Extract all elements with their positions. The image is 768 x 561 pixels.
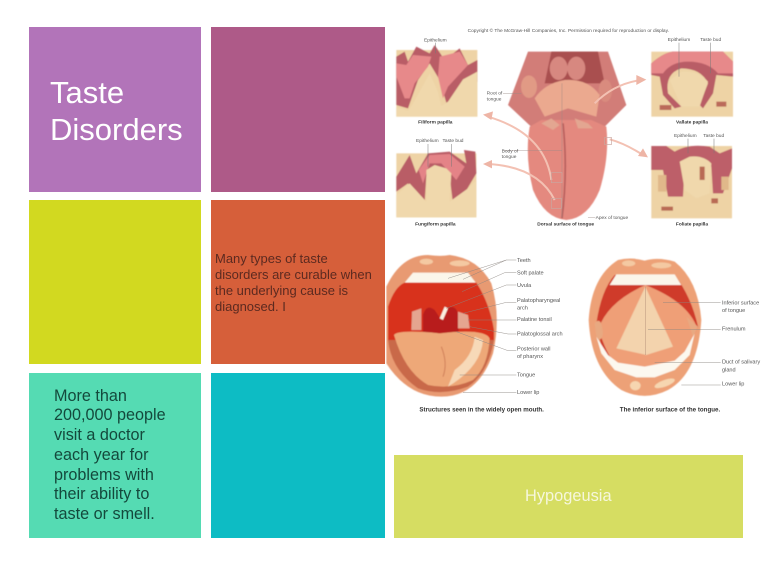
- illustration: dorsal tongue: [483, 52, 648, 220]
- labels: top diagram text: Body of: [502, 148, 519, 154]
- panel: lime tile: [29, 200, 201, 364]
- labels: mouth diagram text: arch: [517, 306, 528, 312]
- illustration: inferior surface of tongue: [589, 258, 721, 396]
- labels: top diagram text: Epithelium: [674, 133, 697, 139]
- labels: mouth diagram text: Palatine tonsil: [517, 317, 552, 323]
- title: [50, 75, 183, 147]
- labels: top diagram text: Apex of tongue: [596, 215, 628, 221]
- title: Taste: [50, 75, 124, 110]
- labels: mouth diagram text: Palatoglossal arch: [517, 332, 563, 338]
- labels: top diagram text: Root of: [487, 91, 503, 97]
- labels: mouth diagram text: [419, 258, 760, 413]
- text block: curable disorders: diagnosed. I: [215, 299, 286, 314]
- labels: top diagram text: Vallate papilla: [676, 119, 708, 125]
- panel: plum tile: [211, 27, 385, 192]
- panel: title tile: [29, 27, 201, 192]
- labels: mouth diagram text: of tongue: [722, 308, 745, 314]
- labels: top diagram text: Dorsal surface of tongue: [537, 221, 594, 227]
- labels: mouth diagram text: Frenulum: [722, 327, 746, 333]
- diagram: tongue anatomy dorsal surface: [396, 27, 733, 227]
- panel: hypogeusia tile: [394, 455, 743, 538]
- labels: mouth diagram text: Tongue: [517, 372, 535, 378]
- labels: top diagram text: [415, 37, 724, 227]
- labels: top diagram text: tongue: [502, 154, 517, 160]
- text block: doctor visits: 200,000 people: [54, 406, 166, 424]
- text block: curable disorders: [215, 251, 372, 314]
- labels: mouth diagram text: Lower lip: [722, 381, 744, 387]
- text block: doctor visits: problems with: [54, 466, 154, 484]
- text block: doctor visits: [54, 386, 166, 523]
- illustration: foliate papilla: [651, 146, 732, 218]
- illustration: widely open mouth: [386, 255, 516, 397]
- labels: mouth diagram text: Soft palate: [517, 270, 544, 276]
- labels: mouth diagram text: gland: [722, 367, 736, 373]
- text block: curable disorders: the underlying cause is: [215, 283, 348, 298]
- labels: top diagram text: Taste bud: [703, 133, 724, 139]
- panel: mint tile: [29, 373, 201, 538]
- labels: top diagram text: Foliate papilla: [676, 221, 708, 227]
- text block: doctor visits: More than: [54, 386, 127, 404]
- panel: teal tile: [211, 373, 385, 538]
- labels: top diagram text: Taste bud: [443, 138, 464, 144]
- labels: top diagram text: Epithelium: [668, 37, 690, 43]
- labels: mouth diagram text: Inferior surface: [722, 301, 759, 307]
- labels: mouth diagram text: Structures seen in the widely open mouth.: [419, 406, 544, 413]
- illustration: vallate papilla: [651, 52, 733, 117]
- text block: curable disorders: Many types of taste: [215, 251, 328, 266]
- labels: mouth diagram text: Teeth: [517, 258, 531, 264]
- labels: mouth diagram text: Uvula: [517, 283, 532, 289]
- labels: mouth diagram text: Posterior wall: [517, 346, 550, 352]
- labels: top diagram text: Fungiform papilla: [415, 221, 456, 227]
- diagram: open mouth and inferior tongue: [386, 255, 760, 413]
- panel: orange tile: [211, 200, 385, 364]
- labels: mouth diagram text: Lower lip: [517, 390, 539, 396]
- copyright line: Copyright © The McGraw-Hill Companies, Inc. Permission required for reproduction or display.: [468, 27, 669, 34]
- label: hypogeusia: Hypogeusia: [525, 487, 612, 505]
- illustration: fungiform papilla: [396, 144, 476, 217]
- illustration: filiform papilla: [396, 45, 477, 117]
- labels: top diagram text: tongue: [487, 96, 502, 102]
- labels: top diagram text: Filiform papilla: [418, 120, 453, 126]
- text block: doctor visits: each year for: [54, 446, 148, 464]
- title: Disorders: [50, 112, 183, 147]
- labels: top diagram text: Taste bud: [700, 37, 721, 43]
- text block: curable disorders: disorders are curable when: [215, 267, 372, 282]
- labels: mouth diagram text: The inferior surface of the tongue.: [620, 406, 720, 413]
- labels: mouth diagram text: Palatopharyngeal: [517, 298, 560, 304]
- labels: mouth diagram text: Duct of salivary: [722, 360, 760, 366]
- labels: top diagram text: Epithelium: [424, 38, 447, 44]
- labels: mouth diagram text: of pharynx: [517, 354, 543, 360]
- text block: doctor visits: their ability to: [54, 485, 149, 503]
- text block: doctor visits: visit a doctor: [54, 426, 145, 444]
- text block: doctor visits: taste or smell.: [54, 505, 155, 523]
- labels: top diagram text: Epithelium: [416, 138, 439, 144]
